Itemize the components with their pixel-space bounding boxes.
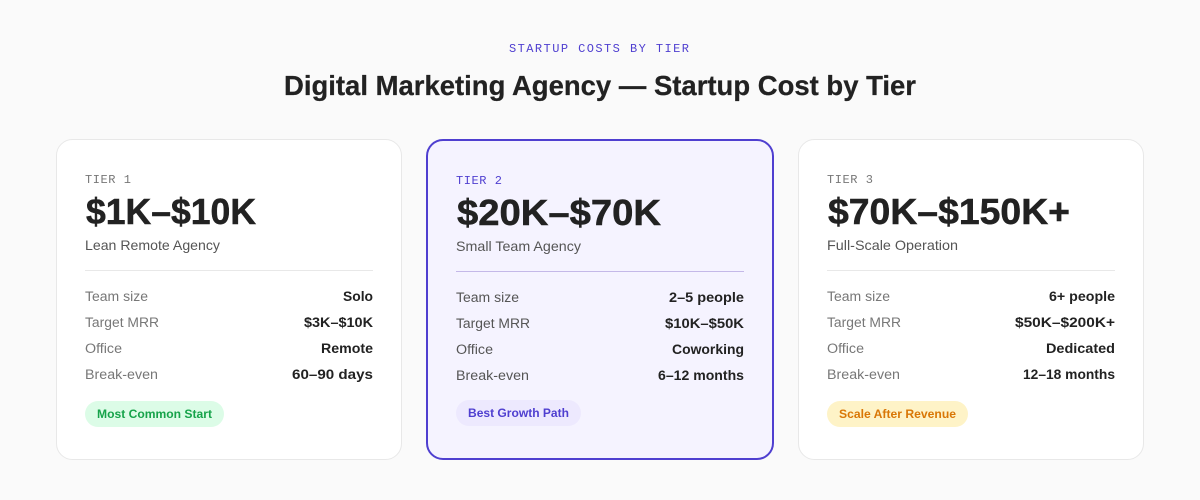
panel: tier 1 [56,140,402,460]
tier 1 details: Remote [321,341,374,356]
badge: best growth path: Best Growth Path [468,406,569,420]
tier 3 label: TIER 3 [827,173,873,187]
badge: best growth path [456,400,581,426]
tier 1 details: Office [85,341,122,356]
tier 1 price: $1K–$10K [86,191,256,232]
badge: scale after revenue: Scale After Revenue [839,407,956,421]
tier 2 details: Break-even [456,368,529,383]
tier 1 details: Break-even [85,367,158,382]
tier 2 details: 6–12 months [658,368,744,383]
tier 3 details: Dedicated [1046,341,1115,356]
tier 1 details [85,289,374,382]
tier 3 name: Full-Scale Operation [827,237,958,253]
tier 2 details: Target MRR [456,316,530,331]
tier 1 details: 60–90 days [292,367,373,382]
badge: most common start [85,401,224,427]
tier 3 details: Break-even [827,367,900,382]
eyebrow label: STARTUP COSTS BY TIER [509,42,689,56]
title: Digital Marketing Agency — Startup Cost by Tier [284,70,916,101]
tier 2 label: TIER 2 [456,174,502,188]
tier 1 details: $3K–$10K [304,315,373,330]
tier 3 details [827,289,1116,382]
tier 3 price: $70K–$150K+ [828,191,1070,232]
tier 1 details: Target MRR [85,315,159,330]
tier 2 price: $20K–$70K [457,192,661,233]
tier 3 details: Target MRR [827,315,901,330]
tier 1 name: Lean Remote Agency [85,237,220,253]
badge: scale after revenue [827,401,968,427]
tier 1 label: TIER 1 [85,173,131,187]
tier 2 details: $10K–$50K [665,316,744,331]
tier 3 details: Team size [827,289,890,304]
panel: tier 2 [427,140,773,459]
tier 3 details: 6+ people [1049,289,1116,304]
tier 3 details: 12–18 months [1023,367,1115,382]
badge: most common start: Most Common Start [97,407,212,421]
tier 2 details: Team size [456,290,519,305]
tier 3 details: Office [827,341,864,356]
panel: tier 3 [798,140,1144,460]
tier 1 details: Solo [343,289,373,304]
tier 1 details: Team size [85,289,148,304]
tier 2 details: 2–5 people [669,290,745,305]
tier 2 details [456,290,745,383]
tier 2 name: Small Team Agency [456,238,581,254]
tier 3 details: $50K–$200K+ [1015,315,1115,330]
tier 2 details: Office [456,342,493,357]
tier 2 details: Coworking [672,342,744,357]
